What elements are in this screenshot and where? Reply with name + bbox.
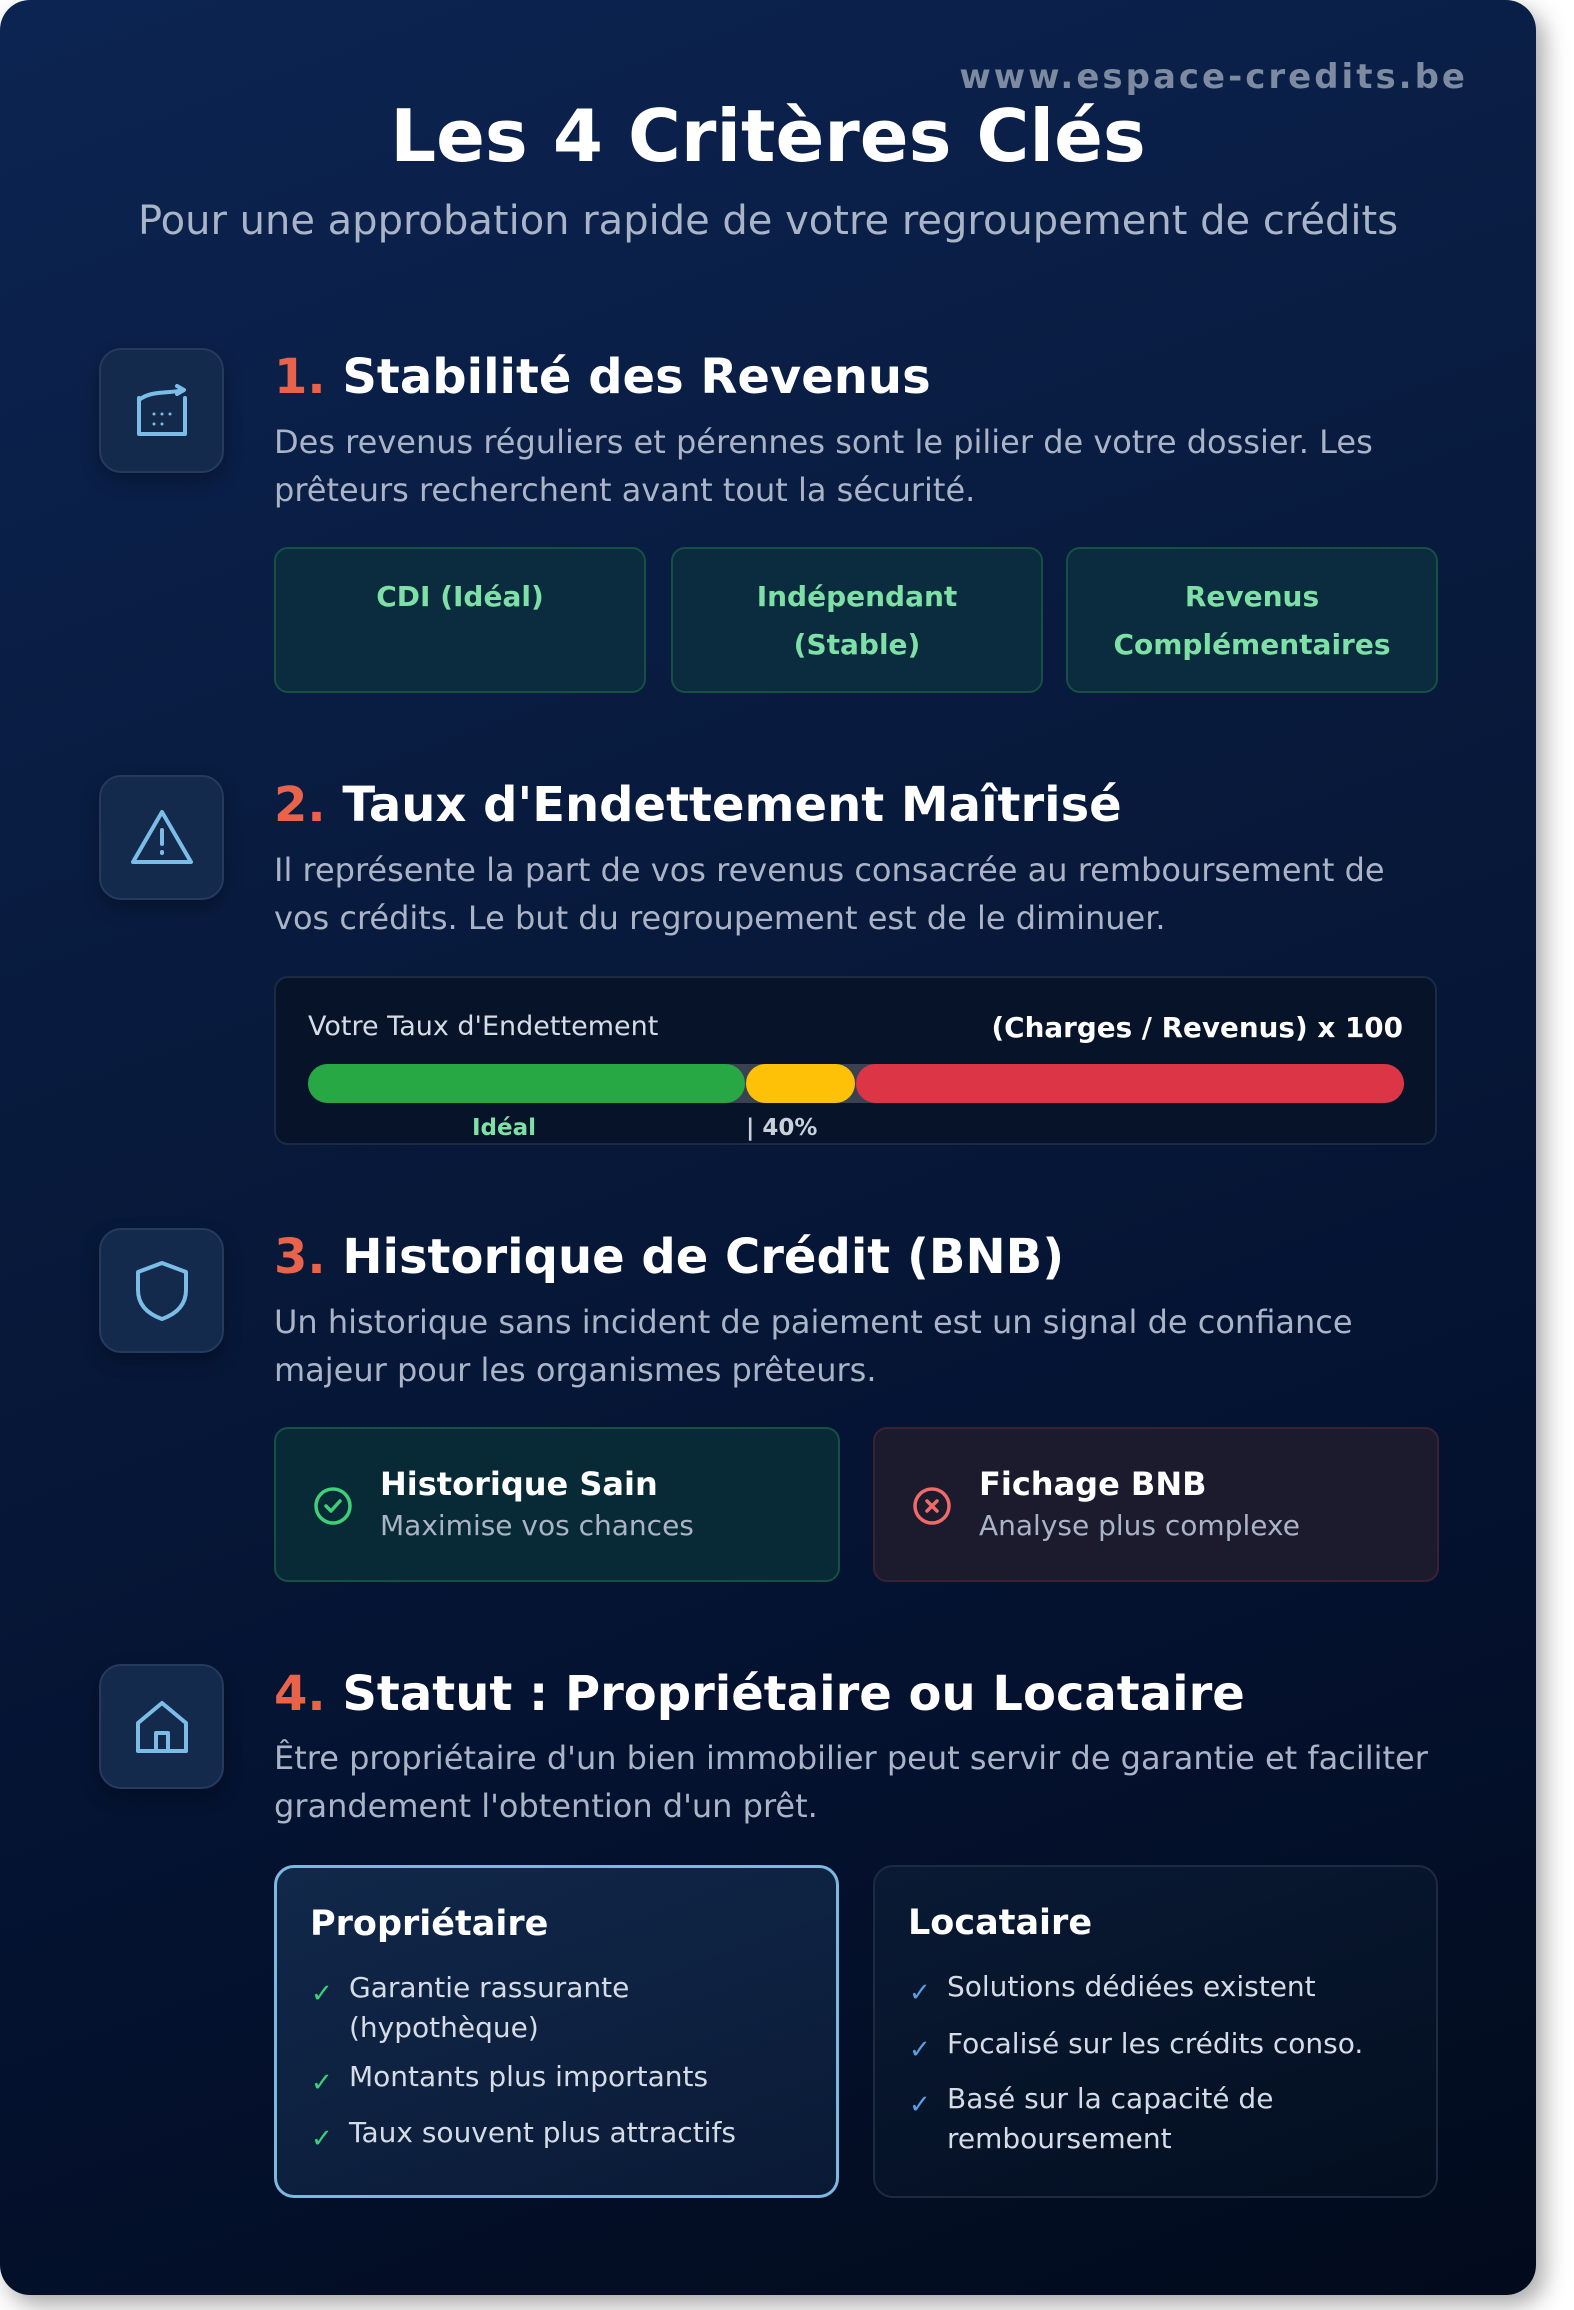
gauge bar: [308, 1064, 1404, 1103]
box: fichage BNB: Fichage BNB: [979, 1465, 1206, 1503]
website url: www.espace-credits.be: [959, 57, 1468, 97]
pill: revenus complementaires: [1066, 547, 1438, 693]
pill: CDI: CDI (Idéal): [376, 580, 544, 613]
heading 2: 2. Taux d'Endettement Maîtrisé: [274, 777, 1122, 833]
box: locataire: ✓: [909, 1978, 931, 2008]
label 40%: | 40%: [746, 1115, 817, 1141]
pill: independant: (Stable): [794, 628, 920, 661]
icon: warning: [99, 775, 224, 900]
box: locataire: ✓: [909, 2090, 931, 2120]
meter label: Votre Taux d'Endettement: [308, 1011, 658, 1042]
text 3: Un historique sans incident de paiement est un signal de confiance majeur pour les organismes prêteurs.: [274, 1303, 1353, 1389]
pill: CDI: [274, 547, 646, 693]
label ideal: Idéal: [472, 1115, 536, 1141]
title: Les 4 Critères Clés: [390, 94, 1146, 178]
heading 4: 4. Statut : Propriétaire ou Locataire: [274, 1666, 1245, 1722]
heading 1: 1. Stabilité des Revenus: [274, 349, 931, 405]
pill: revenus complementaires: Complémentaires: [1113, 628, 1391, 661]
pill: revenus complementaires: Revenus: [1185, 580, 1319, 613]
debt ratio meter: [274, 976, 1437, 1145]
box: proprietaire: ✓: [311, 2124, 333, 2154]
icon: check circle: [314, 1487, 352, 1525]
box: proprietaire: ✓: [311, 2068, 333, 2098]
icon: x circle: [913, 1487, 951, 1525]
pill: independant: [671, 547, 1043, 693]
box: proprietaire: [274, 1865, 839, 2198]
pill: independant: Indépendant: [757, 580, 957, 613]
text 4: Être propriétaire d'un bien immobilier peut servir de garantie et faciliter grandement l'obtention d'un prêt.: [274, 1739, 1428, 1825]
box: locataire: [873, 1865, 1438, 2198]
box: locataire: Locataire: [908, 1903, 1092, 1943]
box: historique sain: [274, 1427, 840, 1582]
box: locataire: Focalisé sur les crédits conso.: [947, 2027, 1363, 2060]
box: locataire: Solutions dédiées existent: [947, 1970, 1316, 2003]
icon: house: [99, 1664, 224, 1789]
text 1: Des revenus réguliers et pérennes sont le pilier de votre dossier. Les prêteurs recherchent avant tout la sécurité.: [274, 423, 1373, 509]
heading 3: 3. Historique de Crédit (BNB): [274, 1229, 1064, 1285]
box: locataire: Basé sur la capacité de remboursement: [947, 2082, 1273, 2155]
subtitle: Pour une approbation rapide de votre regroupement de crédits: [138, 198, 1398, 244]
box: fichage BNB: [873, 1427, 1439, 1582]
formula: (Charges / Revenus) x 100: [991, 1011, 1403, 1044]
text 2: Il représente la part de vos revenus consacrée au remboursement de vos crédits. Le but du regroupement est de le diminuer.: [274, 851, 1385, 937]
box: fichage BNB: Analyse plus complexe: [979, 1509, 1300, 1542]
box: proprietaire: Garantie rassurante (hypothèque): [349, 1971, 629, 2044]
box: historique sain: Historique Sain: [380, 1465, 658, 1503]
icon: wallet: [99, 348, 224, 473]
icon: shield: [99, 1228, 224, 1353]
box: proprietaire: Montants plus importants: [349, 2060, 708, 2093]
box: proprietaire: ✓: [311, 1979, 333, 2009]
box: historique sain: Maximise vos chances: [380, 1509, 694, 1542]
box: locataire: ✓: [909, 2035, 931, 2065]
box: proprietaire: Taux souvent plus attractifs: [349, 2116, 736, 2149]
box: proprietaire: Propriétaire: [310, 1904, 548, 1944]
